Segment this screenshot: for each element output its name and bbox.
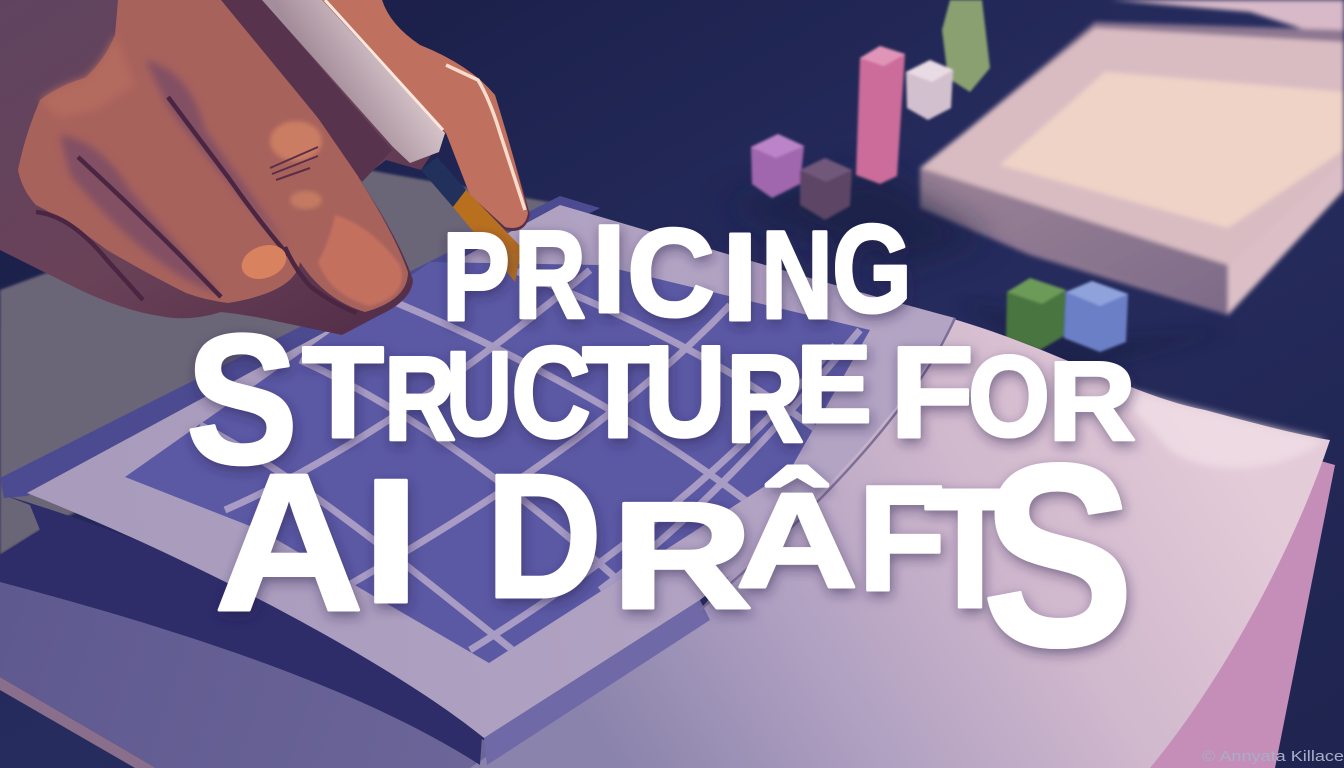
blue page edge: [484, 600, 710, 765]
back of hand skin: [18, 0, 408, 312]
left page: [27, 205, 955, 738]
title: Â: [736, 465, 858, 616]
lower knuckle highlight: [290, 191, 322, 209]
upper knuckle light tone: [40, 35, 135, 118]
title: R: [1048, 339, 1136, 464]
title: T: [582, 319, 654, 465]
title: C: [627, 204, 715, 343]
notebook box: [920, 0, 1344, 315]
hand holding pen: [0, 0, 530, 335]
lower page stack: [0, 560, 620, 768]
finger creases: [36, 97, 357, 313]
knuckle highlight: [270, 121, 322, 161]
title: O: [968, 333, 1050, 461]
title: R: [384, 332, 456, 466]
title: A: [214, 433, 364, 652]
signature: © Annyata Killace: [1202, 748, 1344, 765]
dark strip beside pen: [221, 0, 392, 182]
blue cube: [1064, 281, 1128, 352]
cube shadows: [720, 170, 990, 270]
printed grid: [125, 262, 870, 663]
thumb: [322, 0, 528, 228]
navy page block: [0, 495, 482, 765]
book cover: [1150, 458, 1335, 768]
title: T: [924, 454, 1016, 644]
title: G: [832, 200, 912, 339]
title: I: [592, 200, 626, 339]
title: R: [514, 206, 586, 345]
title: F: [890, 319, 974, 465]
title: P: [442, 208, 510, 347]
white cube: [906, 60, 953, 120]
pen: [262, 0, 522, 282]
title: F: [858, 454, 946, 622]
title: R: [611, 471, 753, 641]
fingernail highlight: [237, 239, 291, 285]
title: R: [726, 330, 804, 469]
grid lines on printed page: [200, 265, 860, 660]
hand base: [0, 0, 530, 335]
title: C: [511, 319, 591, 465]
bottom left dark corner edge: [0, 677, 156, 768]
title: U: [644, 318, 726, 464]
chart blocks: [751, 0, 1128, 352]
title: S: [186, 297, 298, 503]
spine line: [700, 318, 955, 610]
title: [186, 200, 1136, 701]
table surface: [0, 165, 565, 555]
title: I: [362, 442, 420, 640]
finger shading: [145, 60, 290, 250]
knuckle lines: [270, 147, 318, 180]
purple cube: [751, 134, 804, 198]
title: E: [796, 323, 872, 446]
open book: [0, 196, 1335, 768]
right page: [470, 318, 1330, 768]
title: D: [486, 437, 602, 635]
title: N: [761, 206, 833, 345]
thumb highlight: [446, 65, 525, 210]
title: T: [302, 319, 384, 465]
left top blue edge: [0, 196, 600, 498]
green cube: [1006, 278, 1066, 350]
dark mauve cube: [800, 158, 852, 220]
title: S: [982, 411, 1134, 701]
title: I: [722, 208, 758, 347]
sheen on right page: [1110, 385, 1325, 468]
title: U: [446, 327, 512, 461]
lit fingertip: [318, 215, 402, 306]
pink bar: [856, 46, 905, 184]
green tall block: [942, 0, 990, 92]
